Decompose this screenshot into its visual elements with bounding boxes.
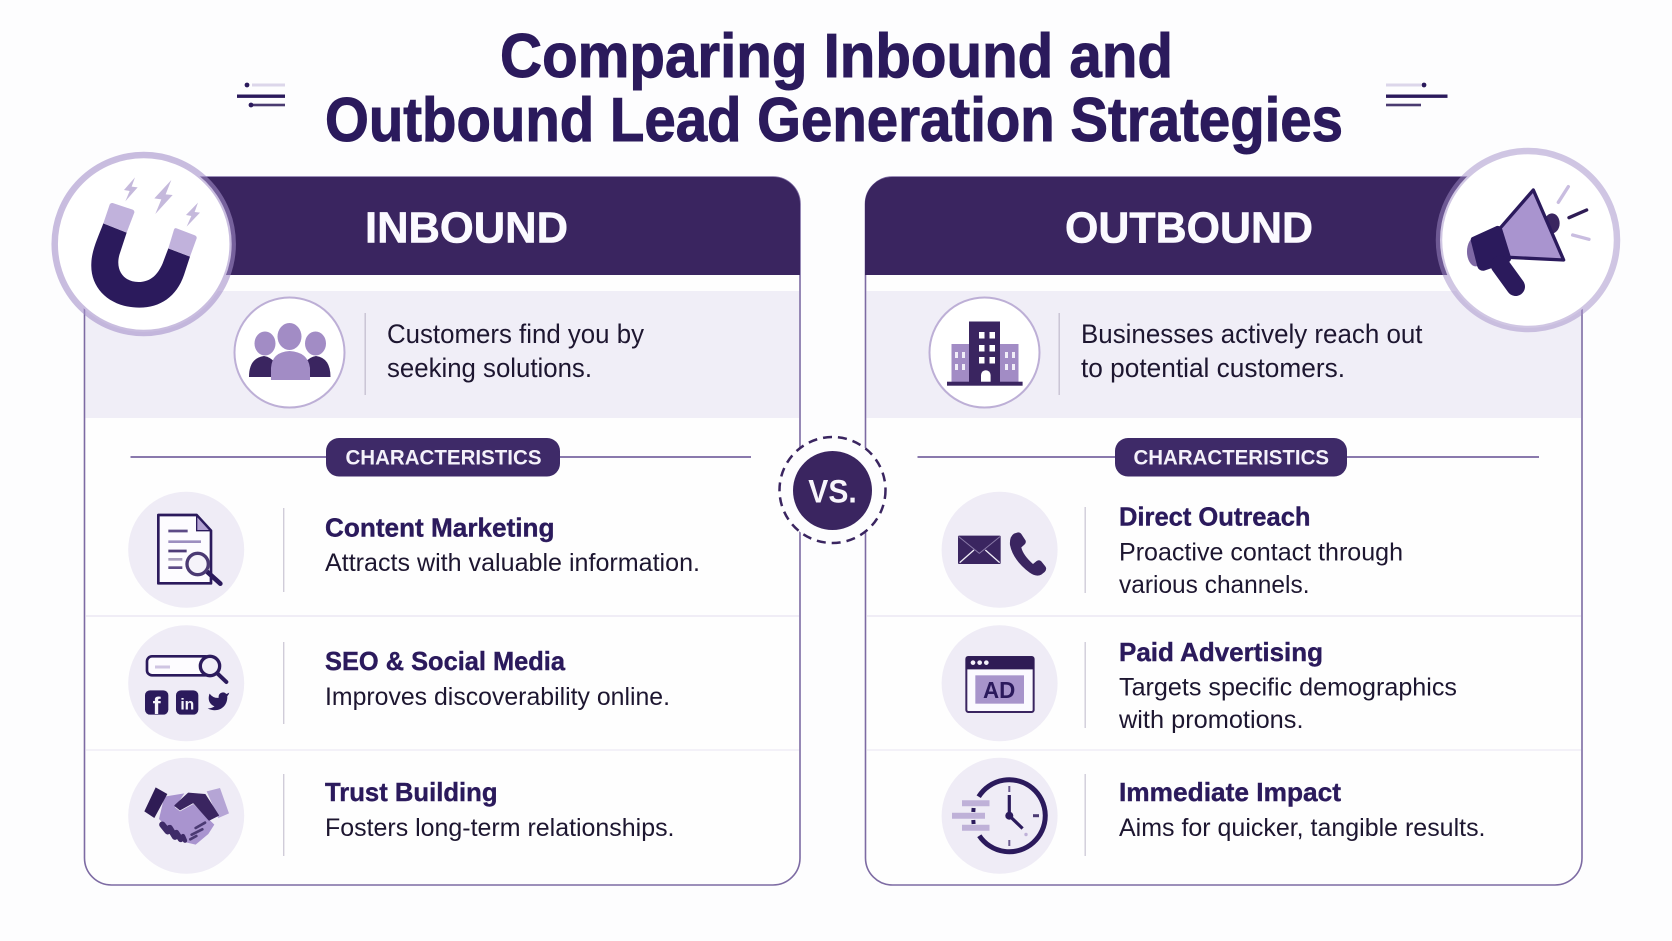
icon: search bar and social logos: in	[180, 696, 194, 713]
characteristics pill: CHARACTERISTICS	[1134, 446, 1329, 470]
icon: office building	[930, 298, 1040, 408]
item: trust building	[128, 758, 674, 874]
icon: right title accent lines	[1386, 83, 1448, 106]
inbound heading: INBOUND	[365, 204, 568, 252]
title: Outbound Lead Generation Strategies	[325, 86, 1343, 155]
trust building text	[325, 777, 674, 842]
paid advertising text: Paid Advertising	[1119, 637, 1323, 667]
title	[325, 22, 1343, 155]
characteristics pill	[1115, 438, 1347, 476]
content marketing text	[325, 512, 700, 577]
icon: handshake	[128, 758, 244, 874]
icon: megaphone badge	[1439, 151, 1617, 329]
inbound definition text: seeking solutions.	[387, 353, 592, 383]
title: Comparing Inbound and	[500, 22, 1173, 91]
panel: outbound	[865, 177, 1582, 885]
icon: left title accent lines	[237, 83, 285, 107]
inbound definition text	[387, 319, 644, 383]
icon: clock with speed lines	[942, 758, 1058, 874]
icon: envelope and phone	[942, 492, 1058, 608]
trust building text: Fosters long-term relationships.	[325, 814, 674, 842]
icon: ad browser window	[942, 625, 1058, 741]
direct outreach text	[1119, 502, 1403, 599]
content marketing text: Content Marketing	[325, 512, 554, 542]
outbound definition text	[1081, 319, 1423, 383]
direct outreach text: Direct Outreach	[1119, 502, 1310, 532]
inbound definition text: Customers find you by	[387, 319, 644, 349]
panel: inbound	[84, 177, 800, 885]
icon: search bar and social logos: f	[153, 693, 162, 720]
icon: ad browser window: AD	[983, 677, 1015, 703]
icon: search bar and social logos	[128, 625, 244, 741]
outbound header bar	[865, 177, 1582, 275]
characteristics pill: CHARACTERISTICS	[346, 446, 542, 470]
immediate impact text: Immediate Impact	[1119, 777, 1341, 807]
characteristics pill	[326, 438, 560, 476]
outbound heading: OUTBOUND	[1065, 204, 1313, 252]
icon: magnet badge	[55, 155, 233, 333]
seo text: SEO & Social Media	[325, 646, 566, 676]
direct outreach text: Proactive contact through	[1119, 539, 1403, 567]
vs badge	[780, 437, 886, 543]
item: seo and social media	[128, 625, 670, 741]
outbound definition text: Businesses actively reach out	[1081, 319, 1423, 349]
vs badge: VS.	[808, 473, 857, 509]
paid advertising text: Targets specific demographics	[1119, 674, 1457, 702]
inbound header bar	[84, 177, 800, 275]
paid advertising text	[1118, 637, 1457, 734]
seo text: Improves discoverability online.	[325, 683, 670, 711]
immediate impact text: Aims for quicker, tangible results.	[1119, 814, 1486, 842]
seo text	[325, 646, 670, 711]
outbound definition band	[866, 291, 1581, 418]
icon: document with magnifier	[128, 492, 244, 608]
outbound definition text: to potential customers.	[1081, 353, 1345, 383]
item: direct outreach	[942, 492, 1403, 608]
item: paid advertising	[942, 625, 1457, 741]
icon: customers group	[234, 298, 344, 408]
item: immediate impact	[942, 758, 1486, 874]
trust building text: Trust Building	[325, 777, 498, 807]
paid advertising text: with promotions.	[1118, 706, 1304, 734]
content marketing text: Attracts with valuable information.	[325, 549, 700, 577]
item: content marketing	[128, 492, 700, 608]
immediate impact text	[1119, 777, 1486, 842]
inbound definition band	[86, 291, 799, 418]
direct outreach text: various channels.	[1119, 571, 1310, 599]
